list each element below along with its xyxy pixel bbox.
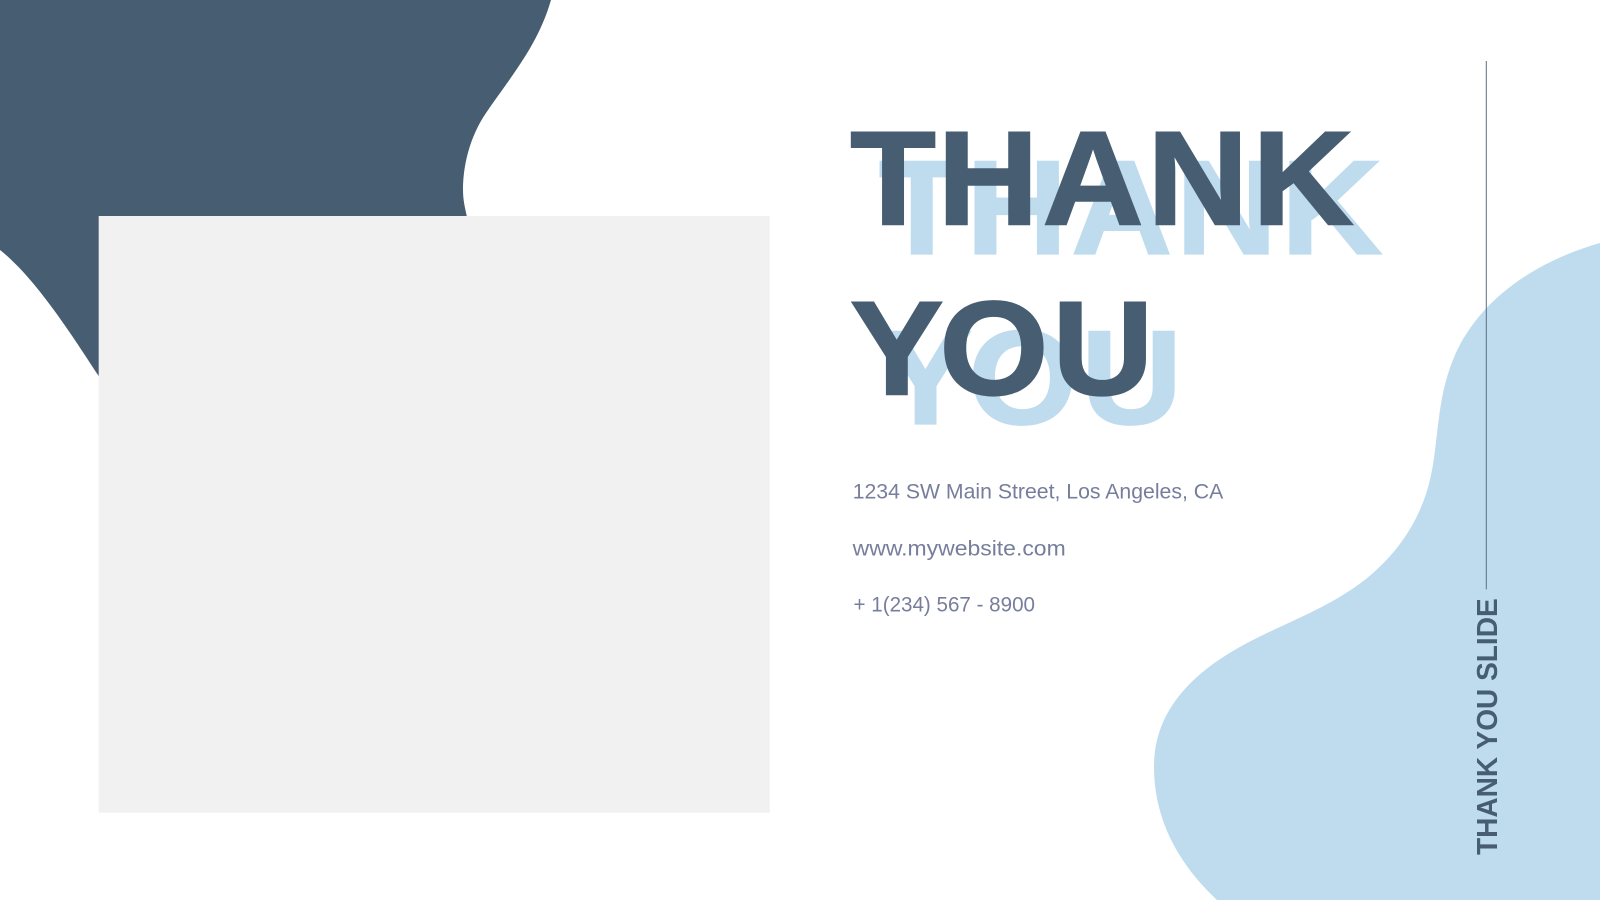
dark blob top left [0, 0, 551, 380]
light blue blob bottom right [1154, 243, 1600, 900]
heading: thank you: YOU [850, 275, 1154, 424]
address: 1234 SW Main Street, Los Angeles, CA [853, 479, 1224, 503]
phone: + 1(234) 567 - 8900 [854, 593, 1035, 617]
heading shadow: light blue thank you: YOU [879, 304, 1182, 453]
vertical line [1486, 61, 1487, 589]
contact details [852, 479, 1224, 617]
website: www.mywebsite.com [852, 537, 1066, 561]
heading: thank you: THANK [850, 105, 1354, 254]
heading: thank you [850, 105, 1354, 424]
image placeholder panel [99, 216, 770, 813]
heading shadow: light blue thank you: THANK [879, 134, 1382, 283]
heading shadow: light blue thank you [879, 134, 1382, 453]
vertical label: THANK YOU SLIDE [1472, 598, 1504, 855]
